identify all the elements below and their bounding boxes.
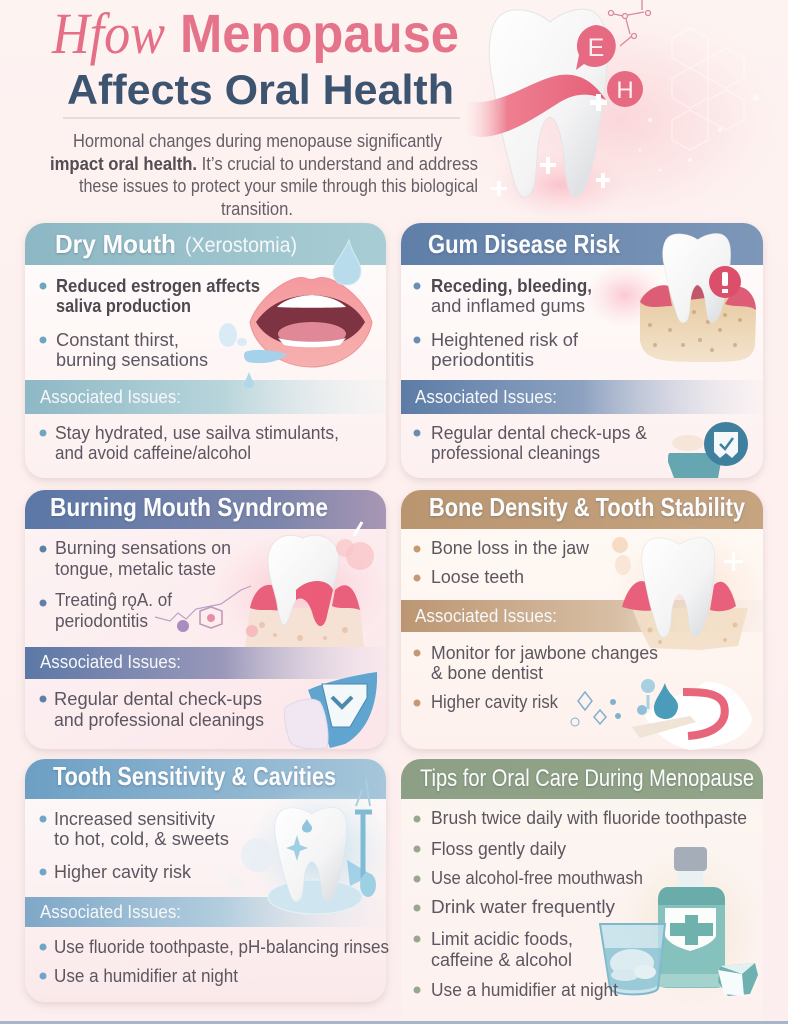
title word: How (script): Hfow: [51, 1, 165, 66]
intro paragraph: [50, 131, 478, 219]
bullets: & bone dentist: [431, 663, 543, 683]
bullets: Higher cavity risk: [431, 692, 559, 712]
header band: [25, 759, 386, 799]
icon: mouthwash bottle: [658, 847, 725, 988]
panel: tips for oral care during menopause: [401, 759, 765, 1021]
bullets: [40, 809, 389, 986]
icon: tooth with inflamed gums: [585, 234, 756, 362]
bullets: and inflamed gums: [431, 296, 585, 316]
hero tooth illustration: [465, 0, 650, 197]
bullets: Monitor for jawbone changes: [431, 643, 658, 663]
intro paragraph: transition.: [221, 199, 293, 219]
heading: Gum Disease Risk: [428, 229, 620, 259]
bullets: tongue, metalic taste: [55, 559, 216, 579]
icon: molecule: [608, 0, 650, 46]
panel: dry mouth: [25, 223, 386, 478]
bullets: to hot, cold, & sweets: [54, 829, 229, 849]
bullets: Regular dental check-ups: [54, 689, 262, 709]
icon: pink ribbon: [465, 75, 606, 137]
icon: ice cube: [718, 963, 758, 996]
bullets: Use fluoride toothpaste, pH-balancing rinses: [54, 937, 389, 957]
bullets: professional cleanings: [431, 443, 600, 463]
icon: tooth in jawbone: [612, 537, 748, 650]
heading: Dry Mouth: [55, 229, 176, 259]
bullets: [414, 808, 747, 1000]
bullets: Limit acidic foods,: [431, 929, 573, 949]
icon: hormone bubble H: [607, 71, 643, 107]
associated issues band: [25, 380, 386, 414]
panel: gum disease risk: [401, 223, 763, 478]
bullets: Heightened risk of: [431, 330, 579, 350]
icon: spill: [244, 350, 287, 363]
bullets: Receding, bleeding,: [431, 276, 592, 296]
icon: water drop: [333, 240, 361, 285]
associated issues label: Associated Issues:: [40, 652, 181, 672]
bullets: burning sensations: [56, 350, 208, 370]
bullets: Floss gently daily: [431, 839, 566, 859]
bullets: [414, 276, 647, 463]
icon: retainer and water drop: [571, 679, 752, 750]
icon: sparkles: [491, 94, 610, 196]
title word: Menopause: Menopause: [180, 4, 459, 64]
bullets: caffeine & alcohol: [431, 950, 572, 970]
bullets: Regular dental check-ups &: [431, 423, 647, 443]
bullets: [414, 538, 658, 712]
associated issues label: Associated Issues:: [415, 387, 557, 407]
bullets: Brush twice daily with fluoride toothpaste: [431, 808, 747, 828]
icon: molecule strand: [155, 586, 251, 628]
intro paragraph: impact oral health. It’s crucial to understand and address: [50, 154, 478, 174]
associated issues label: Associated Issues:: [40, 902, 181, 922]
heading: Burning Mouth Syndrome: [50, 492, 328, 522]
bullets: [40, 276, 339, 463]
associated issues band: [25, 897, 386, 927]
header band: [401, 223, 763, 265]
bullets: Use a humidifier at night: [431, 980, 618, 1000]
header band: [401, 759, 763, 799]
associated issues band: [25, 647, 386, 679]
bullets: Higher cavity risk: [54, 862, 192, 882]
bullets: Burning sensations on: [55, 538, 231, 558]
panel: tooth sensitivity and cavities: [25, 759, 395, 1002]
associated issues band: [401, 600, 763, 632]
bullets: [40, 538, 264, 730]
header band: [25, 490, 386, 529]
heading: Tooth Sensitivity & Cavities: [53, 761, 336, 791]
bullets: Constant thirst,: [56, 330, 179, 350]
heading suffix: (Xerostomia): [185, 234, 297, 257]
panel: bone density and tooth stability: [401, 490, 770, 750]
associated issues label: Associated Issues:: [415, 606, 557, 626]
bullets: Drink water frequently: [431, 897, 615, 917]
icon: water glass with ice: [600, 924, 665, 994]
bullets: Stay hydrated, use sailva stimulants,: [55, 423, 339, 443]
bullets: Bone loss in the jaw: [431, 538, 590, 558]
bullets: Use a humidifier at night: [54, 966, 238, 986]
bullets: Use alcohol-free mouthwash: [431, 868, 643, 888]
header band: [401, 490, 763, 529]
icon: floss container: [284, 672, 377, 749]
bullets: Increased sensitivity: [54, 809, 215, 829]
icon: tooth with burning gums: [155, 522, 374, 647]
bullets: periodontitis: [431, 350, 534, 370]
header glow and hexagon pattern: [455, 10, 785, 230]
bullets: and professional cleanings: [54, 710, 264, 730]
associated issues label: Associated Issues:: [40, 387, 181, 407]
bullets: periodontitis: [55, 611, 148, 631]
icon: dental check-up box: [668, 422, 748, 478]
bullets: Loose teeth: [431, 567, 524, 587]
intro paragraph: Hormonal changes during menopause significantly: [73, 131, 442, 151]
bullets: and avoid caffeine/alcohol: [55, 443, 251, 463]
icon: estrogen bubble E: [576, 25, 616, 70]
icon: hormone bubble H: H: [616, 77, 634, 104]
icon: estrogen bubble E: E: [588, 34, 604, 62]
panel: burning mouth syndrome: [25, 490, 390, 749]
bullets: Treatinĝ rǫA. of: [55, 590, 173, 610]
title: [51, 1, 459, 113]
intro paragraph: these issues to protect your smile through this biological: [79, 176, 478, 196]
bullets: saliva production: [56, 296, 191, 316]
bullets: Reduced estrogen affects: [56, 276, 260, 296]
header band: [25, 223, 386, 265]
bottom edge strip: [0, 1021, 788, 1024]
icon: open mouth: [219, 240, 372, 388]
associated issues band: [401, 380, 763, 414]
icon: sensitive tooth and dental tool: [215, 780, 376, 914]
title line: Affects Oral Health: Affects Oral Health: [67, 66, 454, 113]
icon: alert badge: [709, 266, 741, 298]
